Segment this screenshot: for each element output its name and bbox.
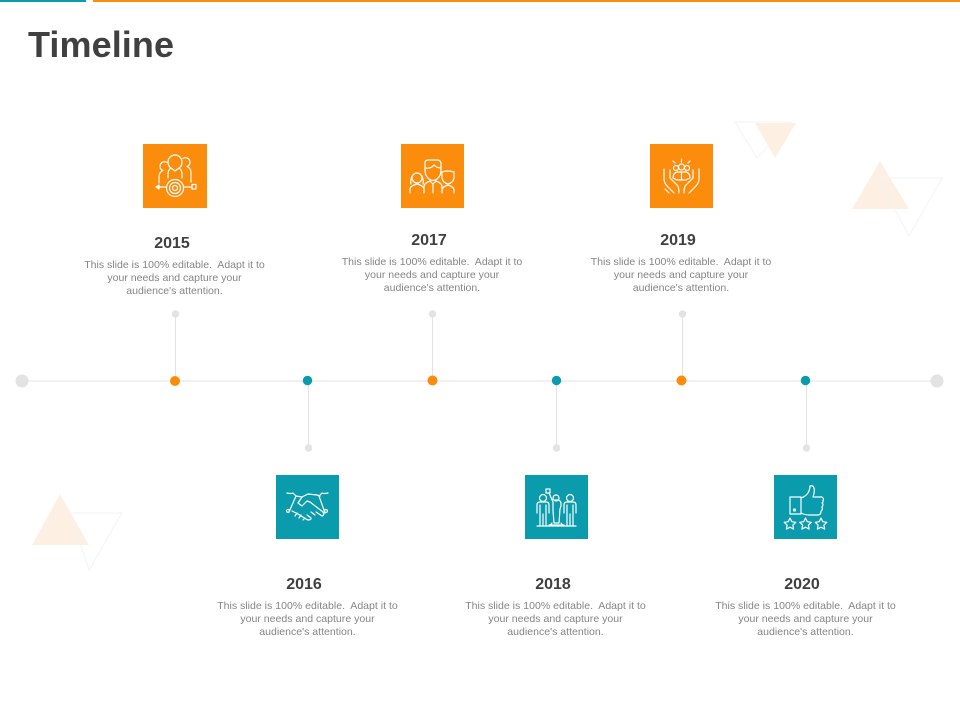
year and text 2020: audience's attention. (757, 626, 854, 638)
decorative triangles: bottom left (32, 494, 122, 570)
year and text 2018: This slide is 100% editable. Adapt it to (465, 600, 646, 612)
year and text 2019 (591, 232, 771, 294)
connector 2017 (428, 310, 438, 386)
year and text 2016: This slide is 100% editable. Adapt it to (217, 600, 398, 612)
year and text 2015: This slide is 100% editable. Adapt it to (84, 259, 265, 271)
year and text 2020 (715, 576, 896, 638)
year and text 2019: audience's attention. (633, 282, 729, 294)
year and text 2020: your needs and capture your (738, 613, 873, 625)
icon: people group 2017 (401, 144, 464, 208)
year and text 2020: 2020 (784, 576, 820, 593)
year and text 2017: 2017 (411, 232, 447, 249)
icon: team target 2015 (143, 144, 207, 208)
year and text 2017: your needs and capture your (365, 269, 500, 281)
year and text 2018: 2018 (535, 576, 571, 593)
year and text 2018 (465, 576, 646, 638)
connector 2016 (303, 376, 312, 452)
icon: thumbs up with stars 2020 (774, 475, 837, 539)
connector 2015 (170, 310, 180, 386)
axis start cap (16, 374, 28, 388)
year and text 2017: This slide is 100% editable. Adapt it to (342, 256, 522, 268)
year and text 2018: audience's attention. (507, 626, 604, 638)
year and text 2019: 2019 (660, 232, 696, 249)
title: Timeline (28, 24, 174, 65)
top accent bar (0, 0, 960, 2)
year and text 2020: This slide is 100% editable. Adapt it to (715, 600, 896, 612)
icon: people with flag 2018 (525, 475, 588, 539)
timeline axis (16, 374, 944, 388)
year and text 2016: audience's attention. (259, 626, 356, 638)
year and text 2019: your needs and capture your (614, 269, 749, 281)
icon: handshake 2016 (276, 475, 339, 539)
connector 2020 (801, 376, 810, 452)
year and text 2019: This slide is 100% editable. Adapt it to (591, 256, 771, 268)
year and text 2017 (342, 232, 522, 294)
connector 2019 (676, 310, 686, 386)
decorative triangles: top right large (852, 161, 942, 236)
year and text 2016 (217, 576, 398, 638)
year and text 2015: 2015 (154, 235, 190, 252)
year and text 2015: your needs and capture your (107, 272, 242, 284)
year and text 2018: your needs and capture your (488, 613, 623, 625)
axis end cap (930, 374, 944, 388)
year and text 2016: 2016 (286, 576, 322, 593)
year and text 2017: audience's attention. (384, 282, 480, 294)
year and text 2016: your needs and capture your (240, 613, 375, 625)
year and text 2015: audience's attention. (126, 285, 223, 297)
connector 2018 (552, 376, 561, 452)
icon: hands holding people 2019 (650, 144, 713, 208)
decorative triangles: top right small (735, 122, 796, 158)
year and text 2015 (84, 235, 265, 297)
